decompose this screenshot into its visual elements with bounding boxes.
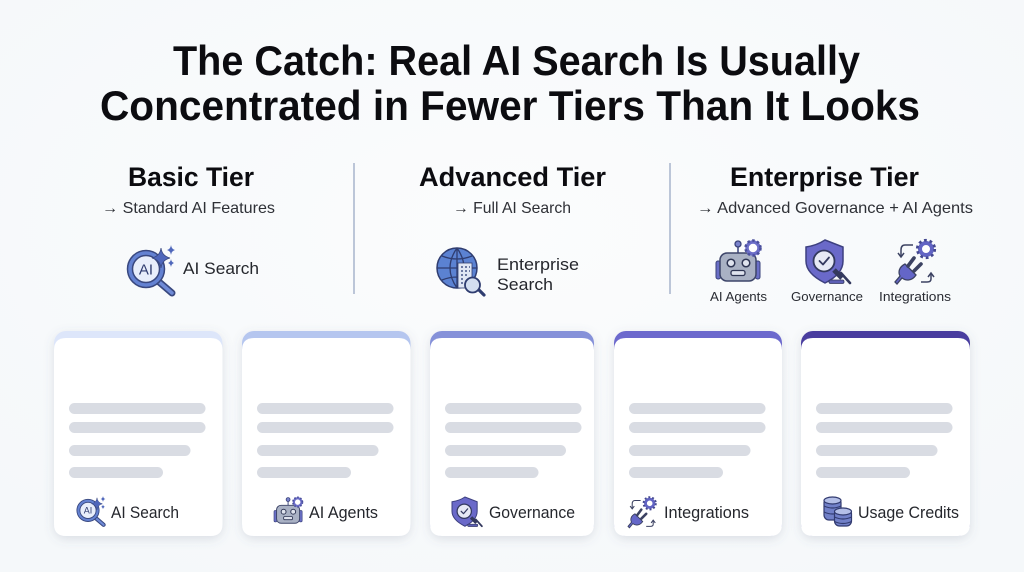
heading: basic tier: Basic Tier: [128, 162, 254, 192]
icon: plug: [628, 497, 656, 528]
subheading: advanced governance plus AI agents: → Advanced Governance + AI Agents: [697, 200, 973, 217]
label: enterprise search: Search: [497, 275, 553, 294]
icon: governance shield: [806, 240, 850, 284]
placeholder text lines: [816, 403, 952, 478]
card: usage credits: [801, 331, 970, 536]
icon: coin stacks: [824, 497, 852, 526]
label: integrations: Integrations: [879, 289, 952, 304]
card: AI search: [54, 331, 222, 536]
icon: AI agents robot: [716, 240, 760, 281]
card: AI agents: [242, 331, 410, 536]
icon: shield: [452, 497, 482, 527]
subheading: full AI search: → Full AI Search: [453, 200, 571, 217]
panel: basic tier: [102, 162, 275, 293]
card: integrations: [614, 331, 782, 536]
panel: advanced tier: [419, 162, 606, 295]
title: Concentrated in Fewer Tiers Than It Looks: [100, 82, 920, 129]
label: AI search: AI Search: [111, 503, 179, 522]
subheading: standard AI features: → Standard AI Features: [102, 200, 275, 217]
placeholder text lines: [257, 403, 394, 478]
icon: integrations plug: [895, 240, 935, 284]
panel: enterprise tier: [697, 162, 973, 304]
placeholder text lines: [629, 403, 766, 478]
card: governance: [430, 331, 594, 536]
label: integrations: Integrations: [664, 503, 749, 522]
heading: enterprise tier: Enterprise Tier: [730, 162, 919, 192]
placeholder text lines: [69, 403, 206, 478]
label: governance: Governance: [489, 503, 575, 522]
label: usage credits: Usage Credits: [858, 503, 959, 522]
label: AI agents: AI Agents: [309, 503, 378, 522]
label: enterprise search: [497, 255, 579, 294]
icon: globe with building and magnifier: [437, 248, 484, 295]
label: enterprise search: Enterprise: [497, 255, 579, 274]
label: AI agents: AI Agents: [710, 289, 768, 304]
icon: AI search: [78, 496, 105, 525]
label: AI search: AI Search: [183, 259, 259, 278]
title: The Catch: Real AI Search Is Usually: [173, 37, 861, 84]
label: governance: Governance: [791, 289, 863, 304]
placeholder text lines: [445, 403, 582, 478]
title: [100, 37, 920, 129]
icon: AI search: [130, 245, 175, 293]
heading: advanced tier: Advanced Tier: [419, 162, 606, 192]
icon: robot: [274, 497, 302, 523]
